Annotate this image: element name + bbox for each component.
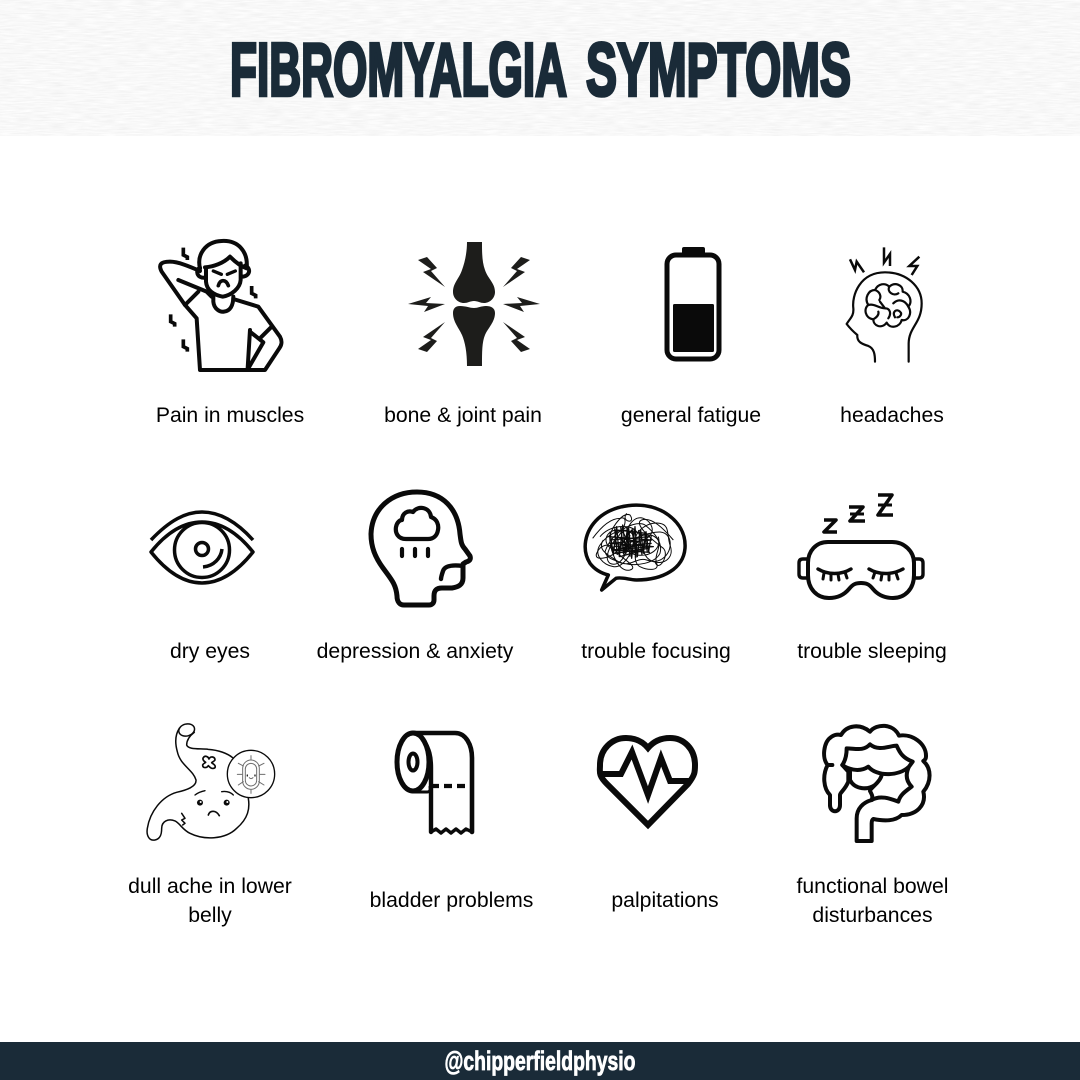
footer handle: @chipperfieldphysio bbox=[444, 1046, 636, 1076]
label: trouble focusing: trouble focusing bbox=[581, 640, 731, 663]
label: bone and joint pain: bone & joint pain bbox=[384, 404, 542, 427]
label: palpitations: palpitations bbox=[611, 889, 719, 912]
header band bbox=[0, 0, 1080, 136]
icon: sleep mask with Zs bbox=[799, 495, 923, 598]
label: functional bowel disturbances: disturbances bbox=[812, 904, 933, 927]
title: SYMPTOMS bbox=[586, 28, 851, 112]
title: FIBROMYALGIA bbox=[230, 28, 567, 112]
label: general fatigue: general fatigue bbox=[621, 404, 761, 427]
label: headaches: headaches bbox=[840, 404, 944, 427]
label: trouble sleeping: trouble sleeping bbox=[797, 640, 947, 663]
label: depression and anxiety: depression & anxiety bbox=[317, 640, 514, 663]
icon: intestines bbox=[824, 726, 930, 841]
icon: person with neck pain bbox=[160, 241, 282, 370]
label: dry eyes: dry eyes bbox=[170, 640, 250, 663]
icon: head with rain cloud bbox=[371, 492, 470, 605]
icon: headache head bbox=[847, 247, 922, 362]
label: functional bowel disturbances: functional bowel bbox=[797, 875, 948, 898]
icon: toilet roll bbox=[397, 733, 472, 833]
icon: dry eye bbox=[151, 512, 253, 583]
icon: bone and joint pain bbox=[408, 242, 540, 366]
label: dull ache in lower belly: belly bbox=[188, 904, 232, 927]
icon: heart with pulse bbox=[600, 738, 695, 825]
icon detail: bacterium bbox=[237, 756, 265, 793]
icon detail: pain bolts bbox=[171, 248, 256, 352]
footer band bbox=[0, 1042, 1080, 1080]
label: pain in muscles: Pain in muscles bbox=[156, 404, 304, 427]
icon: low battery bbox=[667, 247, 719, 359]
icon detail: dense knot bbox=[608, 525, 653, 558]
label: bladder problems: bladder problems bbox=[370, 889, 533, 912]
icon: unhappy stomach with bacteria bbox=[147, 722, 275, 840]
icon: speech bubble with scribble bbox=[585, 505, 685, 590]
icon detail: tangled thoughts bbox=[593, 513, 673, 570]
label: dull ache in lower belly: dull ache in lower bbox=[128, 875, 292, 898]
